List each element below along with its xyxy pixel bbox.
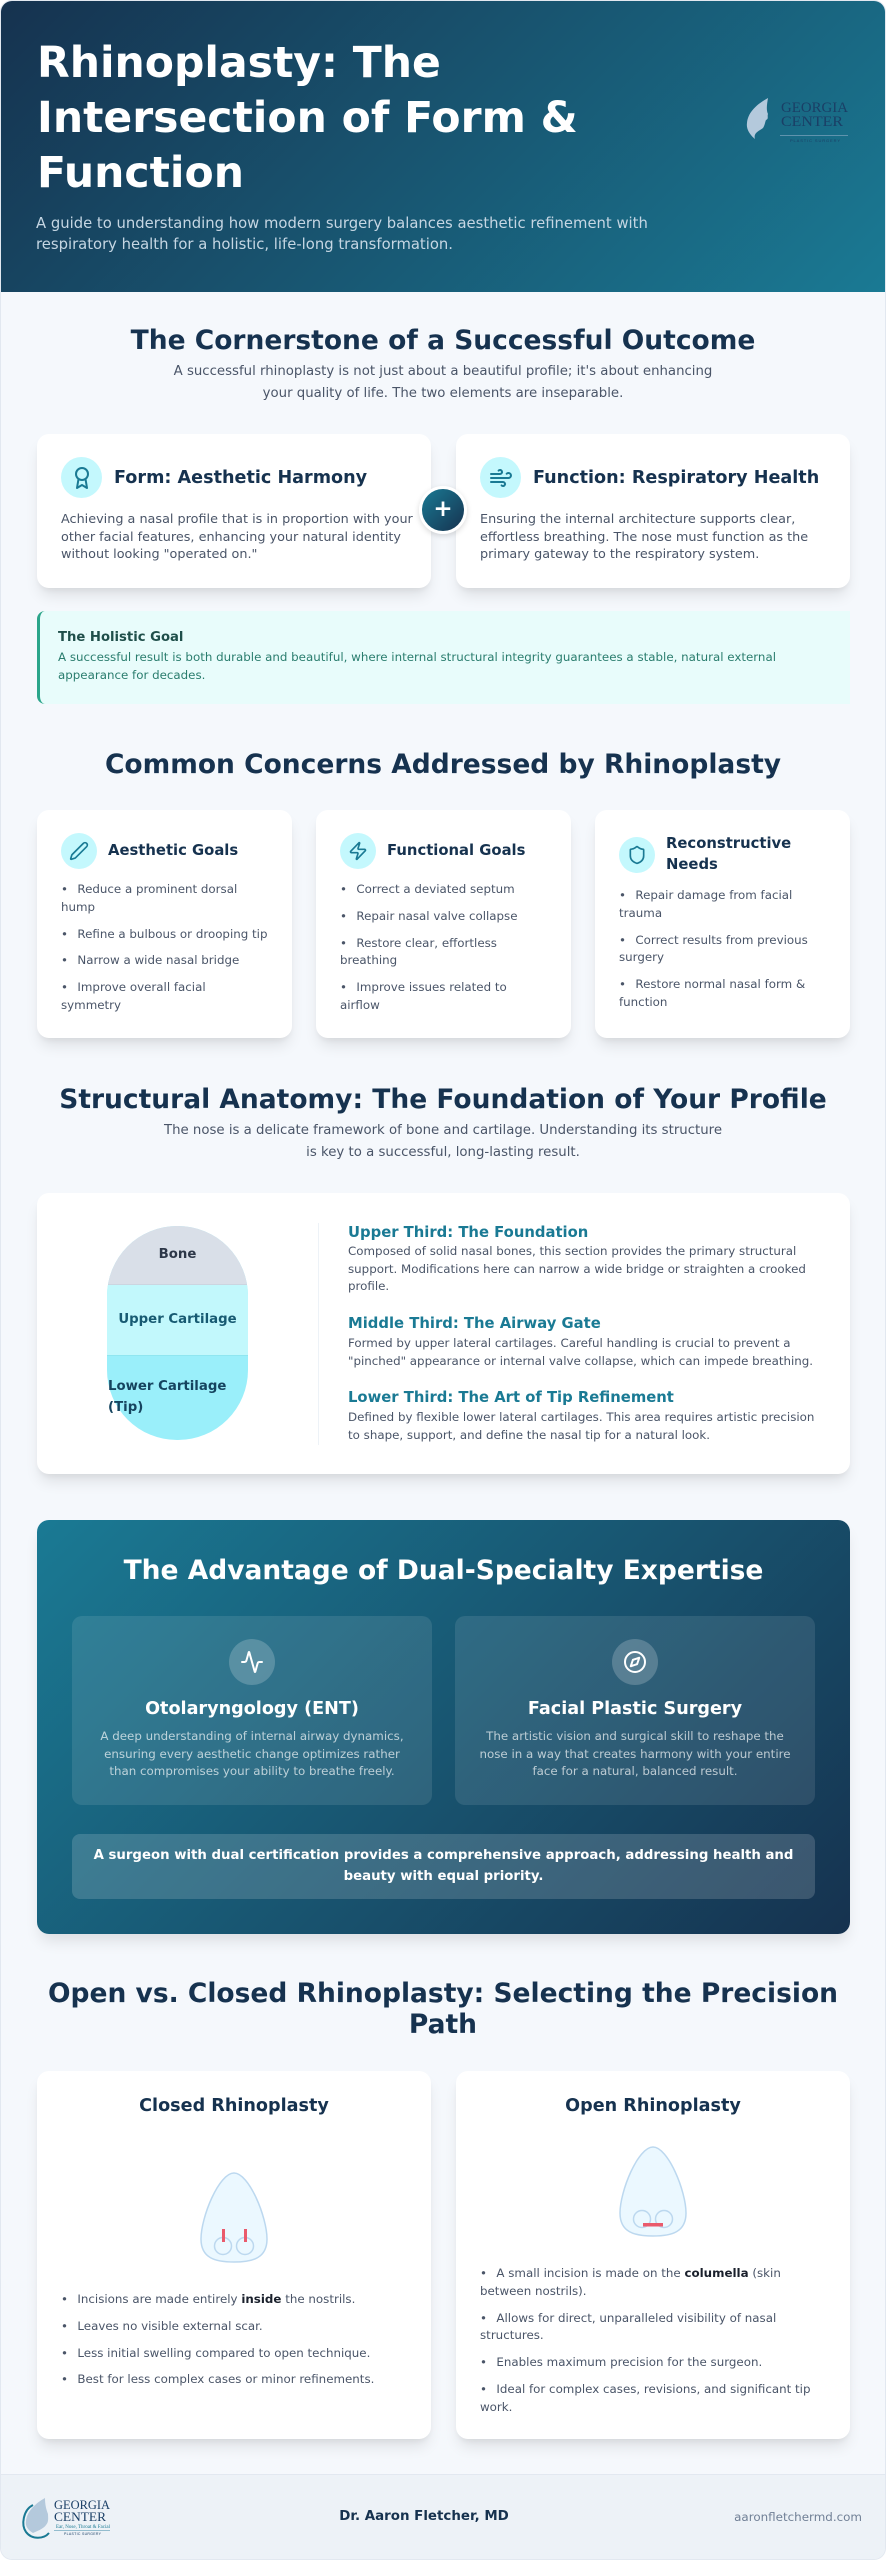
summary banner: beauty with equal priority. xyxy=(344,1869,543,1884)
title xyxy=(37,39,578,198)
label: bone: Bone xyxy=(159,1247,196,1262)
open list: Ideal for complex cases, revisions, and significant tip xyxy=(496,2382,810,2396)
functional list: • xyxy=(340,936,347,950)
panel: form xyxy=(37,434,431,588)
reconstructive list: • xyxy=(619,977,626,991)
form text: Achieving a nasal profile that is in proportion with your xyxy=(61,512,413,527)
intro text: anatomy: The nose is a delicate framework of bone and cartilage. Understanding its structure xyxy=(164,1123,722,1138)
facial plastic text: The artistic vision and surgical skill to reshape the xyxy=(486,1729,784,1743)
panel: open rhinoplasty xyxy=(456,2071,850,2439)
closed heading: Closed Rhinoplasty xyxy=(139,2096,329,2116)
open list: • xyxy=(480,2266,487,2280)
footer logo: Ear, Nose, Throat & Facial xyxy=(56,2525,111,2530)
facial plastic text: face for a natural, balanced result. xyxy=(532,1764,738,1778)
summary banner xyxy=(72,1834,815,1899)
callout text: appearance for decades. xyxy=(58,668,205,682)
upper third heading: Upper Third: The Foundation xyxy=(348,1224,588,1241)
closed list xyxy=(61,2292,374,2386)
footer name: Dr. Aaron Fletcher, MD xyxy=(339,2509,509,2524)
icon: award xyxy=(61,457,102,498)
functional list: airflow xyxy=(340,998,380,1012)
aesthetic list: Improve overall facial xyxy=(77,980,206,994)
lower third text: Defined by flexible lower lateral cartilages. This area requires artistic precision xyxy=(348,1410,814,1424)
functional list: • xyxy=(340,909,347,923)
reconstructive list xyxy=(619,888,808,1009)
open list: A small incision is made on the columella (skin xyxy=(496,2266,781,2280)
middle third text: "pinched" appearance or internal valve collapse, which can impede breathing. xyxy=(348,1354,813,1368)
sub-panel: ENT xyxy=(72,1616,432,1805)
closed list: • xyxy=(61,2346,68,2360)
icon: compass xyxy=(612,1639,658,1685)
lower third text xyxy=(348,1410,814,1442)
aesthetic list: Refine a bulbous or drooping tip xyxy=(77,926,268,940)
functional list: Correct a deviated septum xyxy=(356,882,515,896)
heading: common concerns: Common Concerns Addressed by Rhinoplasty xyxy=(105,749,781,780)
open list: between nostrils). xyxy=(480,2284,587,2298)
functional list: • xyxy=(340,882,347,896)
footer xyxy=(0,2474,886,2560)
functional heading: Functional Goals xyxy=(387,842,525,859)
middle third heading: Middle Third: The Airway Gate xyxy=(348,1315,601,1332)
upper third text xyxy=(348,1244,806,1293)
sub-panel: facial plastic surgery xyxy=(455,1616,815,1805)
form text: without looking "operated on." xyxy=(61,547,257,562)
header logo: GEORGIA xyxy=(781,100,848,116)
footer logo: PLASTIC SURGERY xyxy=(64,2532,102,2536)
reconstructive heading xyxy=(666,835,791,872)
callout heading: The Holistic Goal xyxy=(58,630,183,645)
panel: aesthetic goals xyxy=(37,810,292,1038)
panel: reconstructive needs xyxy=(595,810,850,1038)
reconstructive list: surgery xyxy=(619,950,664,964)
footer website: aaronfletchermd.com xyxy=(734,2510,862,2524)
ENT text xyxy=(100,1729,404,1778)
label: lower cartilage: Lower Cartilage xyxy=(108,1379,226,1394)
aesthetic list: • xyxy=(61,980,68,994)
functional list: • xyxy=(340,980,347,994)
diagram: open incision xyxy=(619,2146,687,2237)
panel: dual-specialty expertise xyxy=(37,1520,850,1934)
diagram: closed incisions xyxy=(200,2172,268,2263)
heading: open vs closed: Open vs. Closed Rhinoplasty: Selecting the Precision xyxy=(48,1978,838,2009)
icon: plus connector: + xyxy=(433,496,453,522)
aesthetic list: hump xyxy=(61,900,95,914)
function text: primary gateway to the respiratory system. xyxy=(480,547,759,562)
middle third text: Formed by upper lateral cartilages. Careful handling is crucial to prevent a xyxy=(348,1336,791,1350)
header logo: PLASTIC SURGERY xyxy=(790,138,840,143)
function heading: Function: Respiratory Health xyxy=(533,468,819,488)
panel: function xyxy=(456,434,850,588)
aesthetic list: • xyxy=(61,926,68,940)
open list: • xyxy=(480,2355,487,2369)
panel: closed rhinoplasty xyxy=(37,2071,431,2439)
header logo xyxy=(746,98,848,143)
lower third text: to shape, support, and define the nasal tip for a natural look. xyxy=(348,1428,710,1442)
title: Intersection of Form & xyxy=(37,94,578,143)
intro text: cornerstone xyxy=(174,364,712,401)
closed list: • xyxy=(61,2372,68,2386)
closed list: Less initial swelling compared to open technique. xyxy=(77,2346,370,2360)
title: Function xyxy=(37,149,244,198)
reconstructive list: Restore normal nasal form & xyxy=(635,977,805,991)
aesthetic list: • xyxy=(61,882,68,896)
form heading: Form: Aesthetic Harmony xyxy=(114,468,367,488)
icon: wind xyxy=(480,457,521,498)
closed list: Best for less complex cases or minor refinements. xyxy=(77,2372,374,2386)
intro text: cornerstone: A successful rhinoplasty is not just about a beautiful profile; it's about enhancing xyxy=(174,364,712,379)
upper third text: Composed of solid nasal bones, this section provides the primary structural xyxy=(348,1244,796,1258)
functional list: Improve issues related to xyxy=(356,980,507,994)
reconstructive list: • xyxy=(619,888,626,902)
lower third heading: Lower Third: The Art of Tip Refinement xyxy=(348,1389,674,1406)
intro text: anatomy xyxy=(164,1123,722,1160)
facial plastic heading: Facial Plastic Surgery xyxy=(528,1699,742,1719)
intro text: anatomy: is key to a successful, long-lasting result. xyxy=(306,1145,580,1160)
reconstructive list: • xyxy=(619,932,626,946)
ENT text: ensuring every aesthetic change optimizes rather xyxy=(104,1747,400,1761)
open list: Enables maximum precision for the surgeon. xyxy=(496,2355,762,2369)
open list: • xyxy=(480,2310,487,2324)
reconstructive list: trauma xyxy=(619,906,662,920)
closed list: • xyxy=(61,2319,68,2333)
open list: work. xyxy=(480,2400,512,2414)
open list: Allows for direct, unparalleled visibility of nasal xyxy=(496,2310,776,2324)
heading: open vs closed xyxy=(48,1978,838,2040)
reconstructive heading: Reconstructive xyxy=(666,835,791,852)
icon: zap xyxy=(340,833,376,869)
callout text xyxy=(58,650,776,682)
open list: • xyxy=(480,2382,487,2396)
heading: open vs closed: Path xyxy=(409,2008,477,2040)
icon: plus connector xyxy=(419,486,467,534)
footer logo: CENTER xyxy=(54,2509,106,2524)
aesthetic list: Reduce a prominent dorsal xyxy=(77,882,237,896)
subtitle: respiratory health for a holistic, life-long transformation. xyxy=(36,236,453,253)
upper third text: profile. xyxy=(348,1279,389,1293)
reconstructive list: Repair damage from facial xyxy=(635,888,792,902)
aesthetic list: Narrow a wide nasal bridge xyxy=(77,953,239,967)
subtitle: A guide to understanding how modern surgery balances aesthetic refinement with xyxy=(36,215,648,232)
aesthetic heading: Aesthetic Goals xyxy=(108,842,238,859)
aesthetic list: symmetry xyxy=(61,998,121,1012)
closed list: Incisions are made entirely inside the nostrils. xyxy=(77,2292,355,2306)
aesthetic list xyxy=(61,882,268,1012)
callout text: A successful result is both durable and beautiful, where internal structural integrity guarantees a stable, natural external xyxy=(58,650,776,664)
callout: holistic goal xyxy=(37,611,850,704)
function text: effortless breathing. The nose must function as the xyxy=(480,530,808,545)
header logo: CENTER xyxy=(781,114,843,130)
form text: other facial features, enhancing your natural identity xyxy=(61,530,401,545)
functional list: Restore clear, effortless xyxy=(356,936,497,950)
label: lower cartilage xyxy=(108,1379,226,1415)
subtitle xyxy=(36,215,648,253)
reconstructive list: function xyxy=(619,995,667,1009)
upper third text: support. Modifications here can narrow a wide bridge or straighten a crooked xyxy=(348,1262,806,1276)
facial plastic text xyxy=(479,1729,791,1778)
title: Rhinoplasty: The xyxy=(37,39,441,88)
closed list: • xyxy=(61,2292,68,2306)
closed list: Leaves no visible external scar. xyxy=(77,2319,263,2333)
open list: structures. xyxy=(480,2328,544,2342)
diagram: nose thirds xyxy=(107,1226,248,1440)
ENT heading: Otolaryngology (ENT) xyxy=(145,1699,359,1719)
icon: activity xyxy=(229,1639,275,1685)
functional list: breathing xyxy=(340,953,397,967)
footer logo: GEORGIA xyxy=(54,2497,111,2512)
function text xyxy=(480,512,808,562)
functional list: Repair nasal valve collapse xyxy=(356,909,518,923)
footer logo xyxy=(22,2497,111,2539)
heading: cornerstone: The Cornerstone of a Successful Outcome xyxy=(131,325,755,356)
open heading: Open Rhinoplasty xyxy=(565,2096,741,2116)
reconstructive heading: Needs xyxy=(666,856,718,872)
open list xyxy=(480,2266,810,2414)
ENT text: than compromises your ability to breathe freely. xyxy=(109,1764,395,1778)
ENT text: A deep understanding of internal airway dynamics, xyxy=(100,1729,404,1743)
function text: Ensuring the internal architecture supports clear, xyxy=(480,512,795,527)
label: upper cartilage: Upper Cartilage xyxy=(118,1312,237,1327)
form text xyxy=(61,512,413,562)
functional list xyxy=(340,882,518,1012)
icon: shield xyxy=(619,837,655,873)
header banner xyxy=(0,0,886,292)
middle third text xyxy=(348,1336,813,1368)
reconstructive list: Correct results from previous xyxy=(635,932,808,946)
label: lower cartilage: (Tip) xyxy=(108,1400,143,1415)
aesthetic list: • xyxy=(61,953,68,967)
heading: structural anatomy: Structural Anatomy: The Foundation of Your Profile xyxy=(59,1084,827,1115)
dual-specialty heading: The Advantage of Dual-Specialty Expertise xyxy=(124,1555,763,1586)
panel: functional goals xyxy=(316,810,571,1038)
intro text: cornerstone: your quality of life. The two elements are inseparable. xyxy=(263,386,623,401)
icon: pen xyxy=(61,833,97,869)
facial plastic text: nose in a way that creates harmony with your entire xyxy=(479,1747,791,1761)
summary banner: A surgeon with dual certification provides a comprehensive approach, addressing health and xyxy=(94,1848,793,1863)
panel: anatomy xyxy=(37,1193,850,1474)
